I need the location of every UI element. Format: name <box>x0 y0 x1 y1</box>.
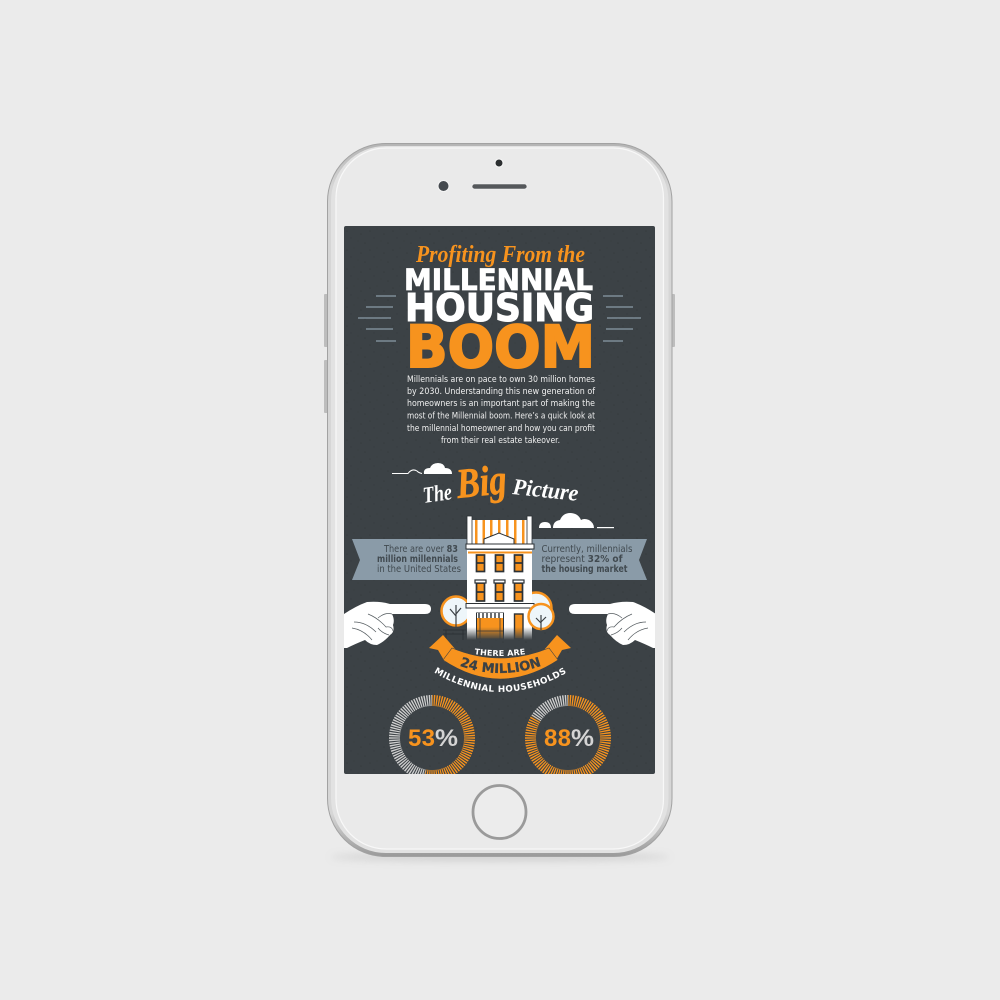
donut: 88 percent: % <box>571 725 594 752</box>
middle windows <box>476 583 522 601</box>
picture: Picture <box>511 474 580 506</box>
earpiece camera dot <box>495 159 503 167</box>
phone shadow <box>330 853 670 861</box>
hand left <box>344 602 431 648</box>
phone body <box>328 144 672 856</box>
ribbon text: 24 million: 24 MILLION <box>460 656 540 674</box>
intro paragraph: the millennial homeowner and how you can profit <box>407 424 595 434</box>
left tree <box>442 596 470 627</box>
decorative lines right <box>603 296 641 341</box>
banner left: There are over 83 <box>383 544 458 555</box>
window hoods <box>475 580 524 583</box>
pediment <box>484 533 514 544</box>
intro paragraph: from their real estate takeover. <box>441 436 560 446</box>
intro paragraph: homeowners is an important part of making the <box>407 399 595 409</box>
trees <box>442 592 552 640</box>
ribbon band <box>443 648 558 679</box>
hand right <box>569 602 656 648</box>
intro paragraph: by 2030. Understanding this new generation of <box>407 387 596 397</box>
side buttons <box>324 294 675 413</box>
bench <box>443 630 466 640</box>
intro paragraph <box>407 375 596 446</box>
banner right: the housing market <box>542 564 628 575</box>
upper windows <box>476 555 522 572</box>
orange ribbon <box>429 635 571 692</box>
ground fade <box>464 627 536 640</box>
donut: 88 percent: 88 <box>544 725 571 752</box>
section heading: the big picture <box>424 466 578 504</box>
intro paragraph: most of the Millennial boom. Here’s a quick look at <box>407 412 595 422</box>
donut: 53 percent: 53 <box>408 725 435 752</box>
ribbon tails <box>429 635 571 662</box>
banner left: million millennials <box>377 554 458 565</box>
decorative lines left <box>358 296 396 341</box>
banner left: in the United States <box>377 564 461 575</box>
ribbon text: millennial households: MILLENNIAL HOUSEHOLDS <box>434 667 566 692</box>
ribbon text: there are: THERE ARE <box>474 648 525 656</box>
building <box>464 516 536 640</box>
donut: 53 percent <box>394 700 470 776</box>
heading: housing: HOUSING <box>405 286 594 331</box>
banner right <box>530 539 647 580</box>
banner right: Currently, millennials <box>542 544 633 555</box>
right back tree <box>532 591 553 610</box>
striped roof <box>471 520 528 544</box>
donut: 88 percent <box>530 700 606 776</box>
intro paragraph: Millennials are on pace to own 30 million homes <box>407 375 595 385</box>
clouds top <box>392 463 452 474</box>
door <box>514 614 523 639</box>
shop front <box>476 613 504 639</box>
screen <box>344 226 655 774</box>
the: The <box>421 479 453 508</box>
banner right: represent 32% of <box>542 554 623 565</box>
clouds right <box>539 513 614 528</box>
banner left <box>352 539 470 580</box>
home button <box>473 786 526 838</box>
big: Big <box>453 457 509 508</box>
roof posts <box>467 516 532 544</box>
middle band <box>466 604 534 608</box>
script heading: Profiting From the <box>415 242 585 268</box>
speaker <box>472 184 527 189</box>
facade <box>467 550 532 640</box>
right front tree <box>528 604 554 630</box>
orange trim <box>468 552 532 554</box>
heading: boom: BOOM <box>406 313 595 381</box>
cornice <box>466 544 534 549</box>
heading: millennial: MILLENNIAL <box>404 263 593 297</box>
title <box>406 244 593 369</box>
phone mockup <box>324 144 675 856</box>
donut: 53 percent: % <box>435 725 458 752</box>
front camera <box>438 180 449 192</box>
